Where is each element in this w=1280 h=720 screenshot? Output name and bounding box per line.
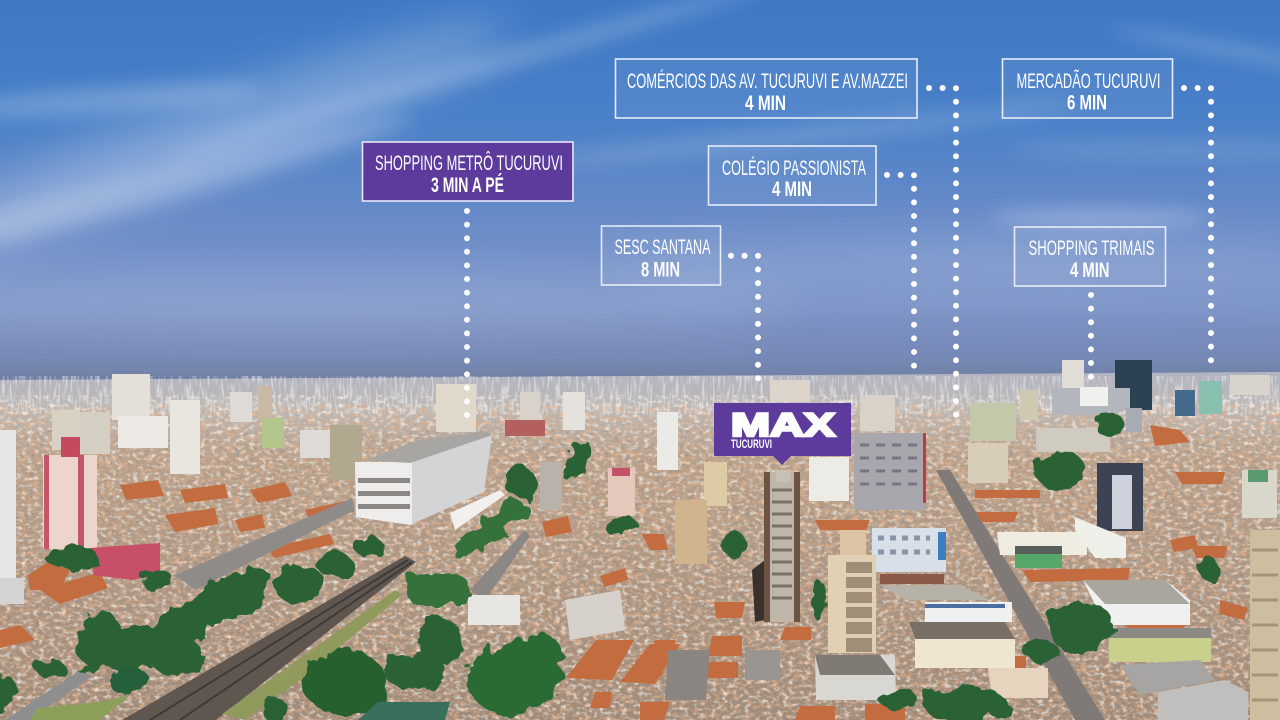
road and railway [5, 470, 1105, 720]
callout: Colégio Passionista: 4 MIN [772, 177, 812, 201]
callout: Comércios das Av. Tucuruvi e Av. Mazzei: 4 MIN [745, 91, 786, 115]
callout: Colégio Passionista [708, 146, 876, 205]
cloud streaks [0, 0, 1280, 336]
beige tower [828, 530, 876, 653]
callout: Shopping Trimais: 4 MIN [1070, 258, 1110, 282]
dotted leader: Shopping Metrô Tucuruvi [464, 211, 470, 428]
callout: Comércios das Av. Tucuruvi e Av. Mazzei: COMÉRCIOS DAS AV. TUCURUVI E AV.MAZZEI [627, 68, 908, 93]
dotted leader: Colégio Passionista [887, 175, 914, 373]
sky background [0, 0, 1280, 385]
trees [0, 413, 1220, 720]
MAX Tucuruvi logo marker [714, 403, 851, 465]
far skyline towers [52, 360, 1270, 564]
callout: Shopping Metrô Tucuruvi [362, 142, 573, 201]
MAX Tucuruvi logo marker: MAX [731, 407, 836, 443]
left towers [0, 430, 160, 604]
Max Tucuruvi tower [764, 470, 800, 622]
dotted leader: Sesc Santana [731, 256, 758, 380]
callout: Sesc Santana: SESC SANTANA [614, 235, 711, 259]
dotted leader: Comércios [929, 88, 956, 415]
soccer court [358, 702, 450, 720]
callout: Mercadão Tucuruvi [1002, 59, 1172, 118]
callout: Colégio Passionista: COLÉGIO PASSIONISTA [722, 155, 866, 180]
shopping mall building [355, 431, 505, 530]
central and right buildings [468, 433, 1280, 720]
callout: Mercadão Tucuruvi: MERCADÃO TUCURUVI [1016, 68, 1160, 93]
city ground [0, 372, 1280, 720]
callout: Sesc Santana [602, 226, 720, 285]
callout: Shopping Trimais: SHOPPING TRIMAIS [1028, 236, 1154, 260]
dotted leader: Shopping Trimais [1088, 295, 1094, 383]
callout: Shopping Metrô Tucuruvi: SHOPPING METRÔ TUCURUVI [375, 150, 563, 175]
callout: Shopping Metrô Tucuruvi: 3 MIN A PÉ [431, 172, 504, 197]
dotted leader: Mercadão Tucuruvi [1184, 88, 1211, 371]
callout: Sesc Santana: 8 MIN [641, 258, 680, 282]
MAX Tucuruvi logo marker: TUCURUVI [731, 439, 772, 451]
rooftops [0, 425, 1248, 720]
callout: Comércios das Av. Tucuruvi e Av. Mazzei [616, 59, 917, 118]
callout: Mercadão Tucuruvi: 6 MIN [1067, 90, 1107, 114]
callout: Shopping Trimais [1014, 227, 1166, 286]
